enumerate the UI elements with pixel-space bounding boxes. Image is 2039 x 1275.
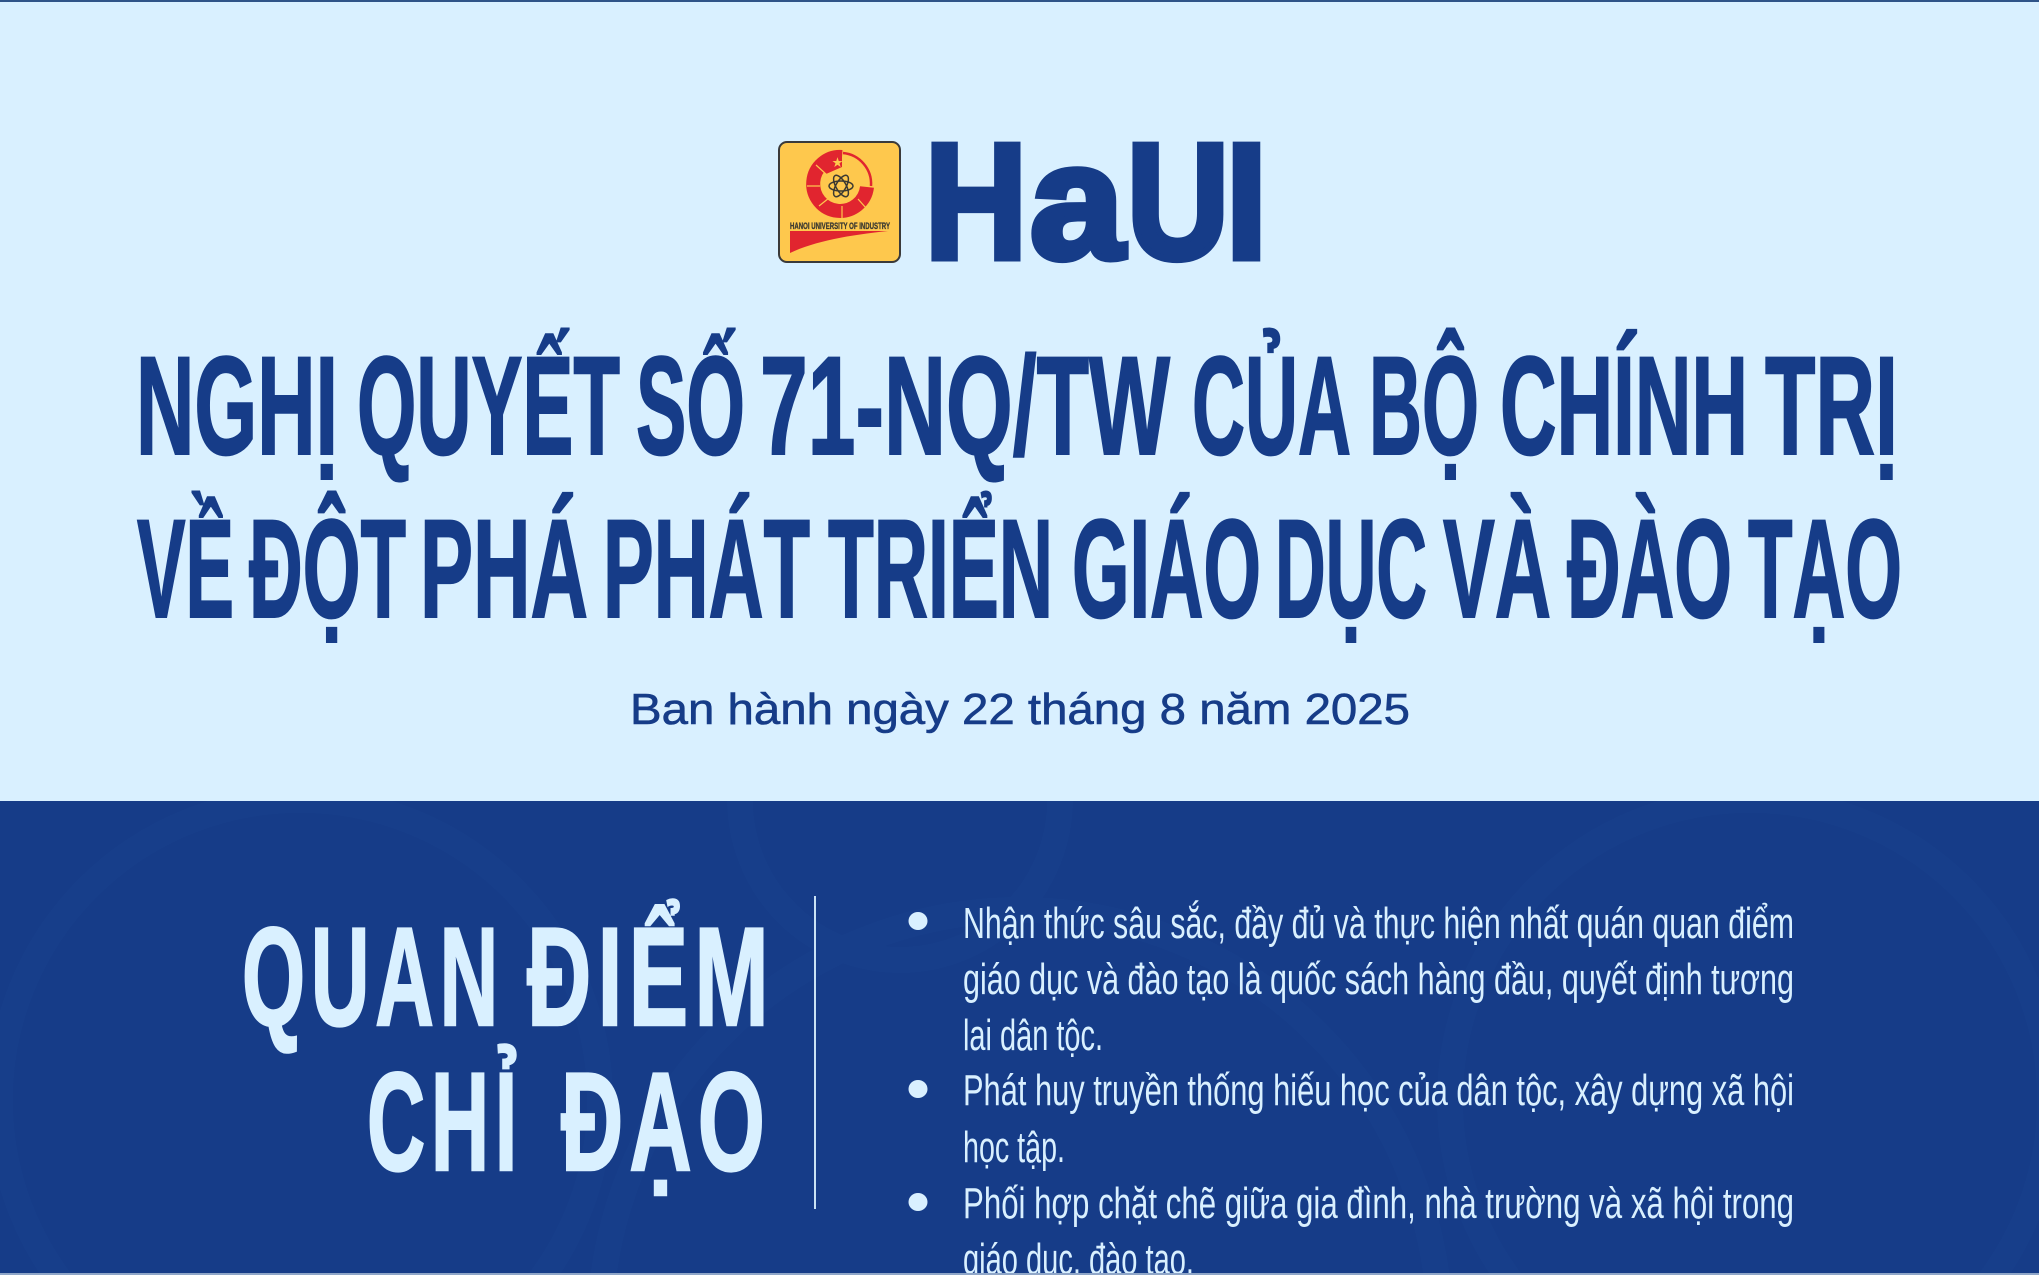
list of viewpoints (908, 899, 1794, 1273)
heading: CHỈ ĐẠO (367, 1043, 771, 1200)
panel: guiding viewpoints (0, 801, 2039, 1273)
title line 2: ĐÀO (1567, 490, 1732, 647)
title line 2: TẠO (1748, 490, 1902, 647)
logo: HaUI emblem: HANOI UNIVERSITY OF INDUSTRY (790, 221, 890, 231)
title line 1: TRỊ (1765, 327, 1898, 484)
panel: header (136, 110, 1902, 734)
heading: CHỈ ĐẠO: CHỈ (367, 1043, 523, 1200)
issue date: Ban hành ngày 22 tháng 8 năm 2025 (630, 685, 1410, 734)
title line 1: QUYẾT (357, 327, 620, 484)
title line 1: CHÍNH (1500, 327, 1748, 484)
logo wordmark: HaUI: I (1226, 110, 1267, 293)
bullet 2 (908, 1066, 1794, 1172)
heading: CHỈ ĐẠO: ĐẠO (561, 1043, 771, 1200)
logo wordmark: HaUI: H (925, 110, 1027, 293)
heading: QUAN ĐIỂM: QUAN (242, 898, 504, 1055)
bullet 1: lai dân tộc. (963, 1011, 1103, 1060)
heading: QUAN ĐIỂM: ĐIỂM (527, 898, 775, 1055)
logo wordmark: HaUI: U (1127, 110, 1229, 293)
title line 2: VÀ (1443, 490, 1551, 647)
title line 2: PHÁ (420, 490, 588, 647)
title line 1: NGHỊ (136, 327, 338, 484)
title line 2 (137, 490, 1902, 647)
title line 1: BỘ (1369, 327, 1479, 484)
title line 1: CỦA (1192, 327, 1351, 484)
divider (814, 896, 816, 1209)
bullet 1 (908, 899, 1794, 1060)
bullet 3 (908, 1179, 1794, 1275)
title line 2: PHÁT (603, 490, 810, 647)
title line 1: 71-NQ/TW (760, 327, 1170, 484)
title line 2: ĐỘT (249, 490, 406, 647)
bullet 2: học tập. (963, 1123, 1065, 1172)
title line 1 (136, 327, 1898, 484)
logo: HaUI emblem (779, 142, 900, 262)
title line 2: VỀ (137, 490, 234, 647)
title line 2: DỤC (1275, 490, 1427, 647)
title line 2: TRIỂN (828, 490, 1053, 647)
logo: HaUI emblem: ★ (832, 157, 843, 169)
logo wordmark: HaUI: a (1030, 110, 1126, 293)
logo wordmark: HaUI (925, 110, 1267, 293)
title line 1: SỐ (636, 327, 745, 484)
title line 2: GIÁO (1072, 490, 1261, 647)
